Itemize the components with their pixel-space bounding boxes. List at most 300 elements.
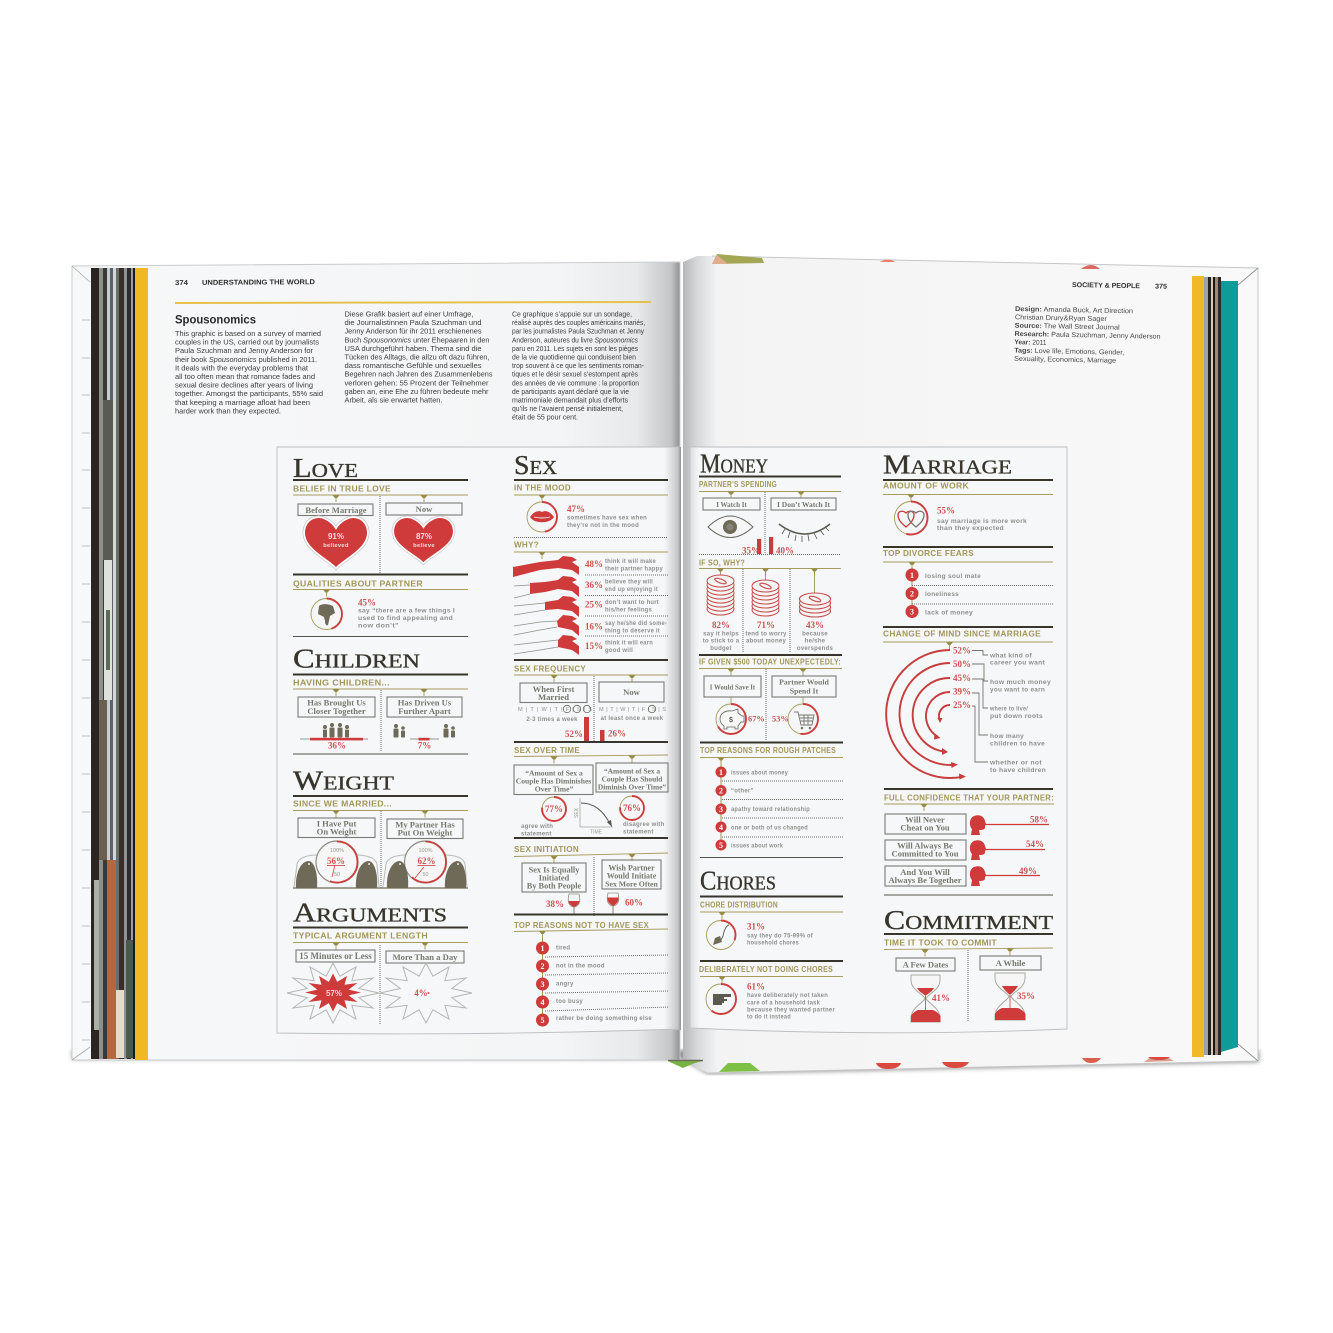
English intro text: sexual desire declines after years of living bbox=[175, 381, 313, 390]
subhead: deliberately not doing chores: DELIBERATELY NOT DOING CHORES bbox=[699, 965, 833, 974]
stat: 43% bbox=[797, 620, 833, 652]
stat: 45%: now don’t” bbox=[358, 624, 399, 630]
list: top reasons: tired bbox=[556, 946, 570, 952]
stat: 82%: budget bbox=[710, 646, 732, 652]
title: Sex: SEX bbox=[514, 450, 558, 480]
French intro text: Ce graphique s’appuie sur un sondage, bbox=[512, 310, 632, 318]
running head right: SOCIETY & PEOPLE bbox=[1072, 282, 1140, 290]
French intro text: tiques et le désir sexuel s’estompent après bbox=[512, 370, 638, 379]
icon: hourglass 41%: 41% bbox=[932, 993, 950, 1003]
French intro text: de participants ayant déclaré que la vie bbox=[512, 387, 629, 396]
title: Weight: WEIGHT bbox=[293, 766, 394, 796]
left cover edge ticks bbox=[72, 266, 90, 1060]
list: top reasons bbox=[536, 942, 669, 1026]
book shadow bbox=[72, 1050, 1259, 1074]
list: rough patches: apathy toward relationship bbox=[731, 807, 810, 813]
English intro text: couples in the US, carried out by journalists bbox=[175, 338, 319, 347]
left page bbox=[72, 262, 680, 1060]
box: when first married: Married bbox=[538, 692, 569, 702]
section: Money bbox=[699, 448, 843, 858]
credits: Research: Paula Szuchman, Jenny Anderson bbox=[1014, 331, 1161, 341]
bar: 7%: 7% bbox=[418, 740, 431, 750]
list: rough patches: “other” bbox=[731, 788, 754, 794]
stat: 53%: 53% bbox=[772, 714, 789, 724]
list: rough patches: 3 bbox=[719, 805, 723, 814]
stat: 82%: to stick to a bbox=[703, 638, 740, 644]
box: when first married bbox=[520, 683, 587, 702]
box: closer together: Closer Together bbox=[307, 706, 366, 716]
section: Weight bbox=[293, 766, 468, 888]
list: rough patches: 4 bbox=[719, 823, 723, 832]
list: top reasons: 4 bbox=[540, 998, 544, 1007]
stat: 47% bbox=[567, 504, 647, 529]
French intro text: de la vie quotidienne qui conduisent bien bbox=[512, 352, 636, 362]
stat: 47%: they’re not in the mood bbox=[567, 523, 639, 529]
list: top reasons: rather be doing something else bbox=[556, 1016, 652, 1022]
box: wish partner: Would Initiate bbox=[607, 872, 657, 880]
icon: starburst 57% bbox=[287, 963, 379, 1023]
list: top reasons: 3 bbox=[540, 980, 544, 989]
stat: 45%: say “there are a few things I bbox=[358, 608, 455, 614]
box: amount diminishes: Over Time” bbox=[535, 784, 573, 794]
box: closer together bbox=[298, 697, 375, 717]
list: top reasons: 5 bbox=[540, 1016, 544, 1025]
connectors and reasons: you want to earn bbox=[990, 688, 1045, 694]
box: would save it: I Would Save It bbox=[710, 684, 756, 692]
list: divorce fears: lack of money bbox=[925, 610, 973, 616]
icon: heart 91%: 91% bbox=[328, 532, 344, 541]
English intro text bbox=[175, 329, 323, 415]
label: agree: statement bbox=[521, 832, 552, 838]
ring: 77%: 77% bbox=[545, 804, 563, 814]
subhead: time it took to commit: TIME IT TOOK TO COMMIT bbox=[884, 938, 997, 948]
French intro text: des années de vie commune : la proportion bbox=[512, 378, 639, 387]
box: wish partner: Sex More Often bbox=[605, 880, 659, 888]
English intro text: It deals with the everyday problems that bbox=[175, 363, 308, 372]
section: Marriage bbox=[883, 450, 1054, 895]
German intro text: Tücken des Alltags, die allzu oft dazu führen, bbox=[344, 352, 490, 362]
title: Arguments: ARGUMENTS bbox=[293, 898, 447, 928]
right page bbox=[683, 256, 1258, 1073]
gutter shading over panel bbox=[664, 447, 681, 1030]
credits: Sexuality, Economics, Marriage bbox=[1014, 356, 1116, 365]
list: why percentages: think it will make bbox=[605, 559, 656, 565]
subhead: if so why: IF SO, WHY? bbox=[699, 558, 745, 568]
list: top reasons: 1 bbox=[540, 944, 544, 953]
icon: starburst 57%: 57% bbox=[326, 989, 342, 998]
yellow header rule bbox=[175, 302, 651, 303]
box: amount should diminish: “Amount of Sex a bbox=[604, 766, 660, 776]
box: amount should diminish: Diminish Over Time” bbox=[598, 782, 666, 792]
ring: 76%: 76% bbox=[623, 803, 641, 813]
stat: 31% bbox=[747, 922, 814, 946]
box: wish partner: Wish Partner bbox=[608, 864, 655, 872]
list: why percentages: 25% bbox=[585, 600, 603, 610]
connectors and reasons: how many bbox=[990, 734, 1024, 740]
box: equally initiated bbox=[522, 863, 586, 892]
box: equally initiated: Initiated bbox=[539, 874, 570, 882]
icon: heart 87%: believe bbox=[413, 543, 435, 549]
icon: starburst 4% bbox=[380, 963, 472, 1023]
box: more than a day: More Than a Day bbox=[393, 952, 458, 962]
box: always together: And You Will bbox=[900, 867, 950, 877]
box: always together bbox=[885, 866, 966, 886]
bars: 35% and 40%: 40% bbox=[776, 546, 794, 556]
section: Children bbox=[293, 644, 468, 754]
English intro text: Paula Szuchman and Jenny Anderson for bbox=[175, 346, 314, 355]
stat: 82%: 82% bbox=[712, 620, 730, 630]
list: divorce fears bbox=[906, 568, 1054, 618]
box: will never cheat: Will Never bbox=[905, 814, 945, 824]
box: now: Now bbox=[416, 504, 433, 514]
stat: 43%: overspends bbox=[797, 646, 833, 652]
list: divorce fears: 1 bbox=[910, 571, 914, 580]
box: I watch it bbox=[703, 498, 760, 510]
stat: 55%: than they expected bbox=[937, 526, 1004, 532]
subhead: since we married: SINCE WE MARRIED... bbox=[293, 800, 392, 808]
credits: Design: Amanda Buck, Art Direction bbox=[1015, 306, 1133, 315]
connectors and reasons: to have children bbox=[990, 768, 1046, 774]
running head right bbox=[1072, 282, 1167, 291]
box: always committed: Will Always Be bbox=[897, 840, 953, 850]
list: rough patches: 5 bbox=[719, 841, 723, 850]
box: I don't watch it: I Don’t Watch It bbox=[777, 500, 830, 509]
section: Arguments bbox=[287, 898, 472, 1024]
subhead: in the mood: IN THE MOOD bbox=[514, 484, 571, 492]
title: Money: MONEY bbox=[700, 448, 768, 478]
subhead: belief in true love: BELIEF IN TRUE LOVE bbox=[293, 484, 391, 494]
English intro text: This graphic is based on a survey of married bbox=[175, 329, 321, 338]
bar: 36%: 36% bbox=[328, 740, 346, 750]
stat: 31%: say they do 75-99% of bbox=[747, 934, 814, 940]
article title: Spousonomics bbox=[175, 314, 256, 326]
French intro text bbox=[512, 310, 645, 422]
credits: Source: The Wall Street Journal bbox=[1015, 323, 1120, 332]
box: partner would spend it: Partner Would bbox=[779, 678, 830, 686]
box: closer together: Has Brought Us bbox=[307, 698, 366, 708]
English intro text: that keeping a marriage afloat had been bbox=[175, 398, 310, 407]
box: amount should diminish bbox=[596, 763, 668, 792]
box: a while bbox=[980, 956, 1041, 970]
chart: sex over time curve: TIME bbox=[590, 830, 603, 836]
right teal band bbox=[1221, 281, 1238, 1052]
list: why percentages: good will bbox=[605, 648, 633, 654]
stat: 43%: he/she bbox=[805, 638, 826, 644]
box: partner would spend it: Spend It bbox=[790, 686, 819, 696]
list: divorce fears: losing soul mate bbox=[925, 574, 981, 580]
list: divorce fears: 3 bbox=[910, 608, 914, 616]
icon: scale 62% bbox=[383, 841, 467, 888]
list: why percentages: don’t want to hurt bbox=[605, 600, 659, 606]
French intro text: matrimoniale demandait plus d’efforts bbox=[512, 396, 628, 404]
English intro text: their book Spousonomics published in 2011. bbox=[175, 355, 317, 364]
chart: nose 58% bbox=[970, 814, 1049, 835]
box: partner put on weight: My Partner Has bbox=[395, 820, 455, 830]
calendar week: first married: M|T|W|T|F|S|S bbox=[518, 707, 592, 713]
subhead: sex initiation: SEX INITIATION bbox=[514, 845, 579, 854]
bar: 36% bbox=[300, 738, 368, 750]
stat: 60% wine: 60% bbox=[625, 898, 643, 908]
connectors and reasons: whether or not bbox=[989, 760, 1042, 766]
chart: sex over time curve bbox=[574, 798, 613, 836]
stat: 71%: about money bbox=[746, 638, 786, 644]
calendar week: first married bbox=[518, 705, 592, 723]
list: why percentages: 48% bbox=[585, 559, 603, 569]
icon: coin stack 43% bbox=[799, 593, 831, 617]
icon: piggy bank ring bbox=[716, 697, 746, 734]
stat: 82% bbox=[703, 620, 740, 652]
list: top reasons: 2 bbox=[540, 962, 544, 971]
stat: 61%: have deliberately not taken bbox=[747, 993, 828, 999]
list: why percentages: 15% bbox=[585, 641, 603, 651]
chart: arms and hands bbox=[513, 556, 579, 655]
French intro text: par les journalistes Paula Szuchman et Jenny bbox=[512, 327, 644, 336]
bar: 26% bbox=[600, 728, 626, 742]
section: Commitment bbox=[884, 905, 1053, 1022]
box: always together: Always Be Together bbox=[888, 875, 962, 885]
bar: 26%: 26% bbox=[608, 728, 626, 738]
list: top reasons: too busy bbox=[556, 999, 583, 1005]
icon: coin stack 71% bbox=[752, 580, 779, 616]
icon: family apart left bbox=[394, 724, 405, 738]
icon: scale 62%: 100% bbox=[418, 848, 433, 854]
box: more than a day bbox=[386, 951, 464, 963]
subhead: partner's spending: PARTNER’S SPENDING bbox=[699, 480, 777, 489]
list: why percentages bbox=[585, 559, 668, 654]
icon: heart 91%: believed bbox=[323, 543, 349, 549]
bar: 52% bbox=[565, 717, 589, 742]
title: Love: LOVE bbox=[293, 453, 358, 483]
labels: arc percentages: 50% bbox=[953, 659, 971, 669]
list: why percentages: their partner happy bbox=[605, 566, 663, 572]
box: always committed bbox=[885, 840, 966, 860]
subhead: having children: HAVING CHILDREN... bbox=[293, 678, 390, 688]
icon: coin stack 82% bbox=[707, 575, 734, 615]
list: why percentages: thing to deserve it bbox=[605, 628, 660, 634]
box: amount should diminish: Couple Has Should bbox=[602, 774, 663, 784]
subhead: typical argument length: TYPICAL ARGUMENT LENGTH bbox=[293, 932, 428, 940]
English intro text: together. Amongst the participants, 55% said bbox=[175, 389, 323, 398]
label: disagree: statement bbox=[623, 830, 654, 836]
bar: 52%: 52% bbox=[565, 729, 583, 739]
list: rough patches: 1 bbox=[719, 768, 723, 777]
icon: heart 87%: 87% bbox=[416, 532, 432, 541]
stat: 82%: say it helps bbox=[703, 632, 739, 638]
subhead: top divorce fears: TOP DIVORCE FEARS bbox=[883, 549, 974, 558]
right yellow band bbox=[1192, 276, 1204, 1057]
German intro text bbox=[344, 310, 493, 404]
title: Chores: CHORES bbox=[700, 866, 776, 896]
box: amount diminishes bbox=[514, 765, 593, 794]
box: further apart: Has Driven Us bbox=[398, 698, 452, 708]
German intro text: Begehren nach Jahren des Zusammenlebens bbox=[344, 370, 493, 379]
connectors and reasons: how much money bbox=[990, 680, 1051, 686]
credits: Tags: Love life, Emotions, Gender, bbox=[1014, 347, 1124, 357]
icon: hourglass 41% bbox=[911, 975, 950, 1022]
German intro text: verloren gehen: 55 Prozent der Teilnehmer bbox=[344, 378, 489, 387]
subhead: chore distribution: CHORE DISTRIBUTION bbox=[700, 900, 778, 910]
icon: closed eye bbox=[779, 524, 830, 542]
box: I have put on weight bbox=[298, 818, 375, 838]
box: equally initiated: Sex Is Equally bbox=[529, 866, 580, 874]
stat: 45%: 45% bbox=[358, 598, 376, 608]
box: always committed: Committed to You bbox=[892, 848, 959, 858]
icon: scale 56% bbox=[294, 841, 379, 888]
stat: 67%: 67% bbox=[748, 714, 765, 724]
box: will never cheat: Cheat on You bbox=[900, 822, 950, 832]
English intro text: all too often mean that romance fades and bbox=[175, 372, 315, 381]
list: divorce fears: loneliness bbox=[925, 592, 959, 598]
icon: thumb down ring bbox=[311, 598, 342, 630]
stat: 71%: tend to worry bbox=[745, 632, 787, 638]
subhead: top reasons for rough patches: TOP REASONS FOR ROUGH PATCHES bbox=[700, 746, 836, 755]
icon: open eye bbox=[708, 516, 753, 538]
stat: 55%: say marriage is more work bbox=[937, 519, 1027, 525]
French intro text: qu’ils ne l’avaient pensé initialement, bbox=[512, 404, 623, 413]
icon: pointing hand ring bbox=[706, 984, 736, 1014]
stat: 45% bbox=[358, 598, 455, 630]
stat: 61%: 61% bbox=[747, 982, 765, 992]
icon: heart 87% bbox=[394, 518, 453, 562]
calendar week: now: M|T|W|T|F|S|S bbox=[599, 707, 666, 713]
icon: heart 91% bbox=[305, 518, 367, 567]
bars: 35% and 40%: 35% bbox=[742, 546, 760, 556]
German intro text: Diese Grafik basiert auf einer Umfrage, bbox=[344, 310, 474, 318]
stat: 38% wine bbox=[546, 894, 580, 915]
connectors and reasons: career you want bbox=[990, 660, 1045, 666]
stat: 61%: to do it instead bbox=[747, 1014, 791, 1020]
cover pattern peeking out on the bottom edge bbox=[668, 1057, 1174, 1072]
icon: hourglass 35%: 35% bbox=[1017, 991, 1035, 1001]
German intro text: gaben an, eine Ehe zu führen bedeute mehr bbox=[344, 387, 489, 396]
list: divorce fears: 2 bbox=[910, 590, 914, 598]
gutter shading right page bbox=[683, 447, 700, 1032]
box: a while: A While bbox=[996, 958, 1026, 968]
stat: 47%: 47% bbox=[567, 504, 585, 514]
icon: family together bbox=[323, 723, 349, 738]
box: I have put on weight: I Have Put bbox=[317, 818, 356, 828]
chart: nose 54%: 54% bbox=[1026, 839, 1044, 849]
chart: nose 49%: 49% bbox=[1019, 866, 1037, 876]
connectors and reasons: where to live/ bbox=[989, 706, 1028, 712]
box: I have put on weight: On Weight bbox=[317, 826, 356, 836]
box: partner put on weight: Put On Weight bbox=[398, 828, 453, 838]
subhead: sex over time: SEX OVER TIME bbox=[514, 746, 580, 755]
stat: 55% bbox=[937, 506, 1027, 532]
labels: arc percentages: 25% bbox=[953, 700, 971, 710]
ring: 77% bbox=[542, 797, 566, 821]
French intro text: paru en 2011. Les sujets en sont les pièges bbox=[512, 344, 638, 353]
box: 15 minutes or less: 15 Minutes or Less bbox=[299, 951, 372, 961]
icon: linked hearts ring bbox=[894, 502, 928, 534]
labels: arc percentages bbox=[953, 646, 971, 710]
stat: 55%: 55% bbox=[937, 506, 955, 516]
German intro text: Arbeit, als sie erwartet hatten. bbox=[344, 396, 442, 404]
box: amount diminishes: Couple Has Diminishes bbox=[516, 776, 591, 786]
chart: nose 54% bbox=[970, 839, 1045, 860]
list: rough patches bbox=[716, 766, 843, 850]
French intro text: réalisé auprès des couples américains mariés, bbox=[512, 318, 645, 327]
list: rough patches: 2 bbox=[719, 786, 723, 796]
title: Commitment: COMMITMENT bbox=[884, 905, 1053, 935]
box: now bbox=[599, 682, 664, 702]
bar: 7% bbox=[410, 738, 439, 750]
icon: scale 56%: 50 bbox=[334, 872, 340, 878]
box: a few dates: A Few Dates bbox=[903, 960, 949, 970]
running head left: UNDERSTANDING THE WORLD bbox=[202, 279, 315, 287]
stat: 31%: 31% bbox=[747, 922, 765, 932]
connectors and reasons bbox=[972, 650, 1051, 774]
icon: scale 56%: 100% bbox=[330, 848, 344, 854]
subhead: amount of work: AMOUNT OF WORK bbox=[883, 482, 969, 490]
French intro text: trop souvent à ce que les sentiments roman- bbox=[512, 361, 644, 370]
left page stack of book pages bbox=[91, 268, 135, 1059]
labels: arc percentages: 45% bbox=[953, 673, 971, 683]
label: agree bbox=[521, 824, 553, 838]
stat: 61% bbox=[747, 982, 835, 1020]
box: partner put on weight bbox=[387, 819, 463, 838]
icon: scale 62%: 62% bbox=[418, 856, 436, 866]
chart: concentric arcs bbox=[886, 650, 966, 780]
box: wish partner bbox=[602, 860, 661, 889]
list: top reasons: not in the mood bbox=[556, 964, 605, 970]
subhead: qualities about partner: QUALITIES ABOUT PARTNER bbox=[293, 580, 423, 588]
box: now bbox=[386, 503, 462, 515]
icon: hourglass 35% bbox=[995, 973, 1035, 1020]
stat: 45%: used to find appealing and bbox=[358, 616, 453, 622]
list: rough patches: issues about money bbox=[731, 770, 788, 776]
icon: starburst 4%: 4% bbox=[414, 988, 428, 998]
stat: 60% wine bbox=[607, 893, 643, 915]
box: I don't watch it bbox=[771, 498, 836, 510]
subhead: sex frequency: SEX FREQUENCY bbox=[514, 664, 586, 674]
stat: 43%: 43% bbox=[806, 620, 824, 630]
section: Love bbox=[293, 453, 468, 636]
credits: Year: 2011 bbox=[1014, 339, 1047, 347]
subhead: change of mind: CHANGE OF MIND SINCE MARRIAGE bbox=[883, 630, 1041, 638]
stat: 31%: household chores bbox=[747, 940, 799, 946]
box: would save it bbox=[704, 676, 761, 697]
labels: arc percentages: 52% bbox=[953, 646, 971, 656]
subhead: why: WHY? bbox=[514, 540, 539, 550]
list: why percentages: end up enjoying it bbox=[605, 587, 658, 593]
German intro text: USA durchgeführt haben. Thema sind die bbox=[344, 344, 482, 353]
chart: nose 49% bbox=[970, 866, 1040, 886]
subhead: if given $500: IF GIVEN $500 TODAY UNEXPECTEDLY: bbox=[699, 658, 841, 666]
icon: shopping cart ring bbox=[788, 697, 818, 734]
title: Children: CHILDREN bbox=[293, 644, 420, 674]
stat: 71% bbox=[745, 620, 787, 644]
box: will never cheat bbox=[885, 814, 966, 834]
label: agree: agree with bbox=[521, 824, 553, 830]
left yellow band bbox=[135, 268, 148, 1060]
list: rough patches: one or both of us changed bbox=[731, 826, 808, 832]
icon: vacuum ring bbox=[706, 920, 736, 950]
running head right: 375 bbox=[1155, 283, 1167, 291]
calendar week: first married: 2-3 times a week bbox=[526, 717, 578, 723]
German intro text: Jenny Anderson für ihr 2011 erschienenes bbox=[344, 327, 482, 336]
French intro text: Anderson, auteures du livre Spousonomics bbox=[512, 335, 638, 344]
English intro text: harder work than they expected. bbox=[175, 406, 281, 415]
stat: 38% wine: 38% bbox=[546, 899, 564, 909]
running head left: 374 bbox=[175, 280, 188, 287]
box: amount diminishes: “Amount of Sex a bbox=[525, 768, 583, 778]
icon: lips ring bbox=[527, 502, 557, 532]
icon: scale 56%: 56% bbox=[327, 856, 345, 866]
German intro text: Buch Spousonomics unter Ehepaaren in den bbox=[344, 335, 490, 344]
list: rough patches: issues about work bbox=[731, 844, 783, 850]
box: further apart bbox=[387, 697, 462, 717]
